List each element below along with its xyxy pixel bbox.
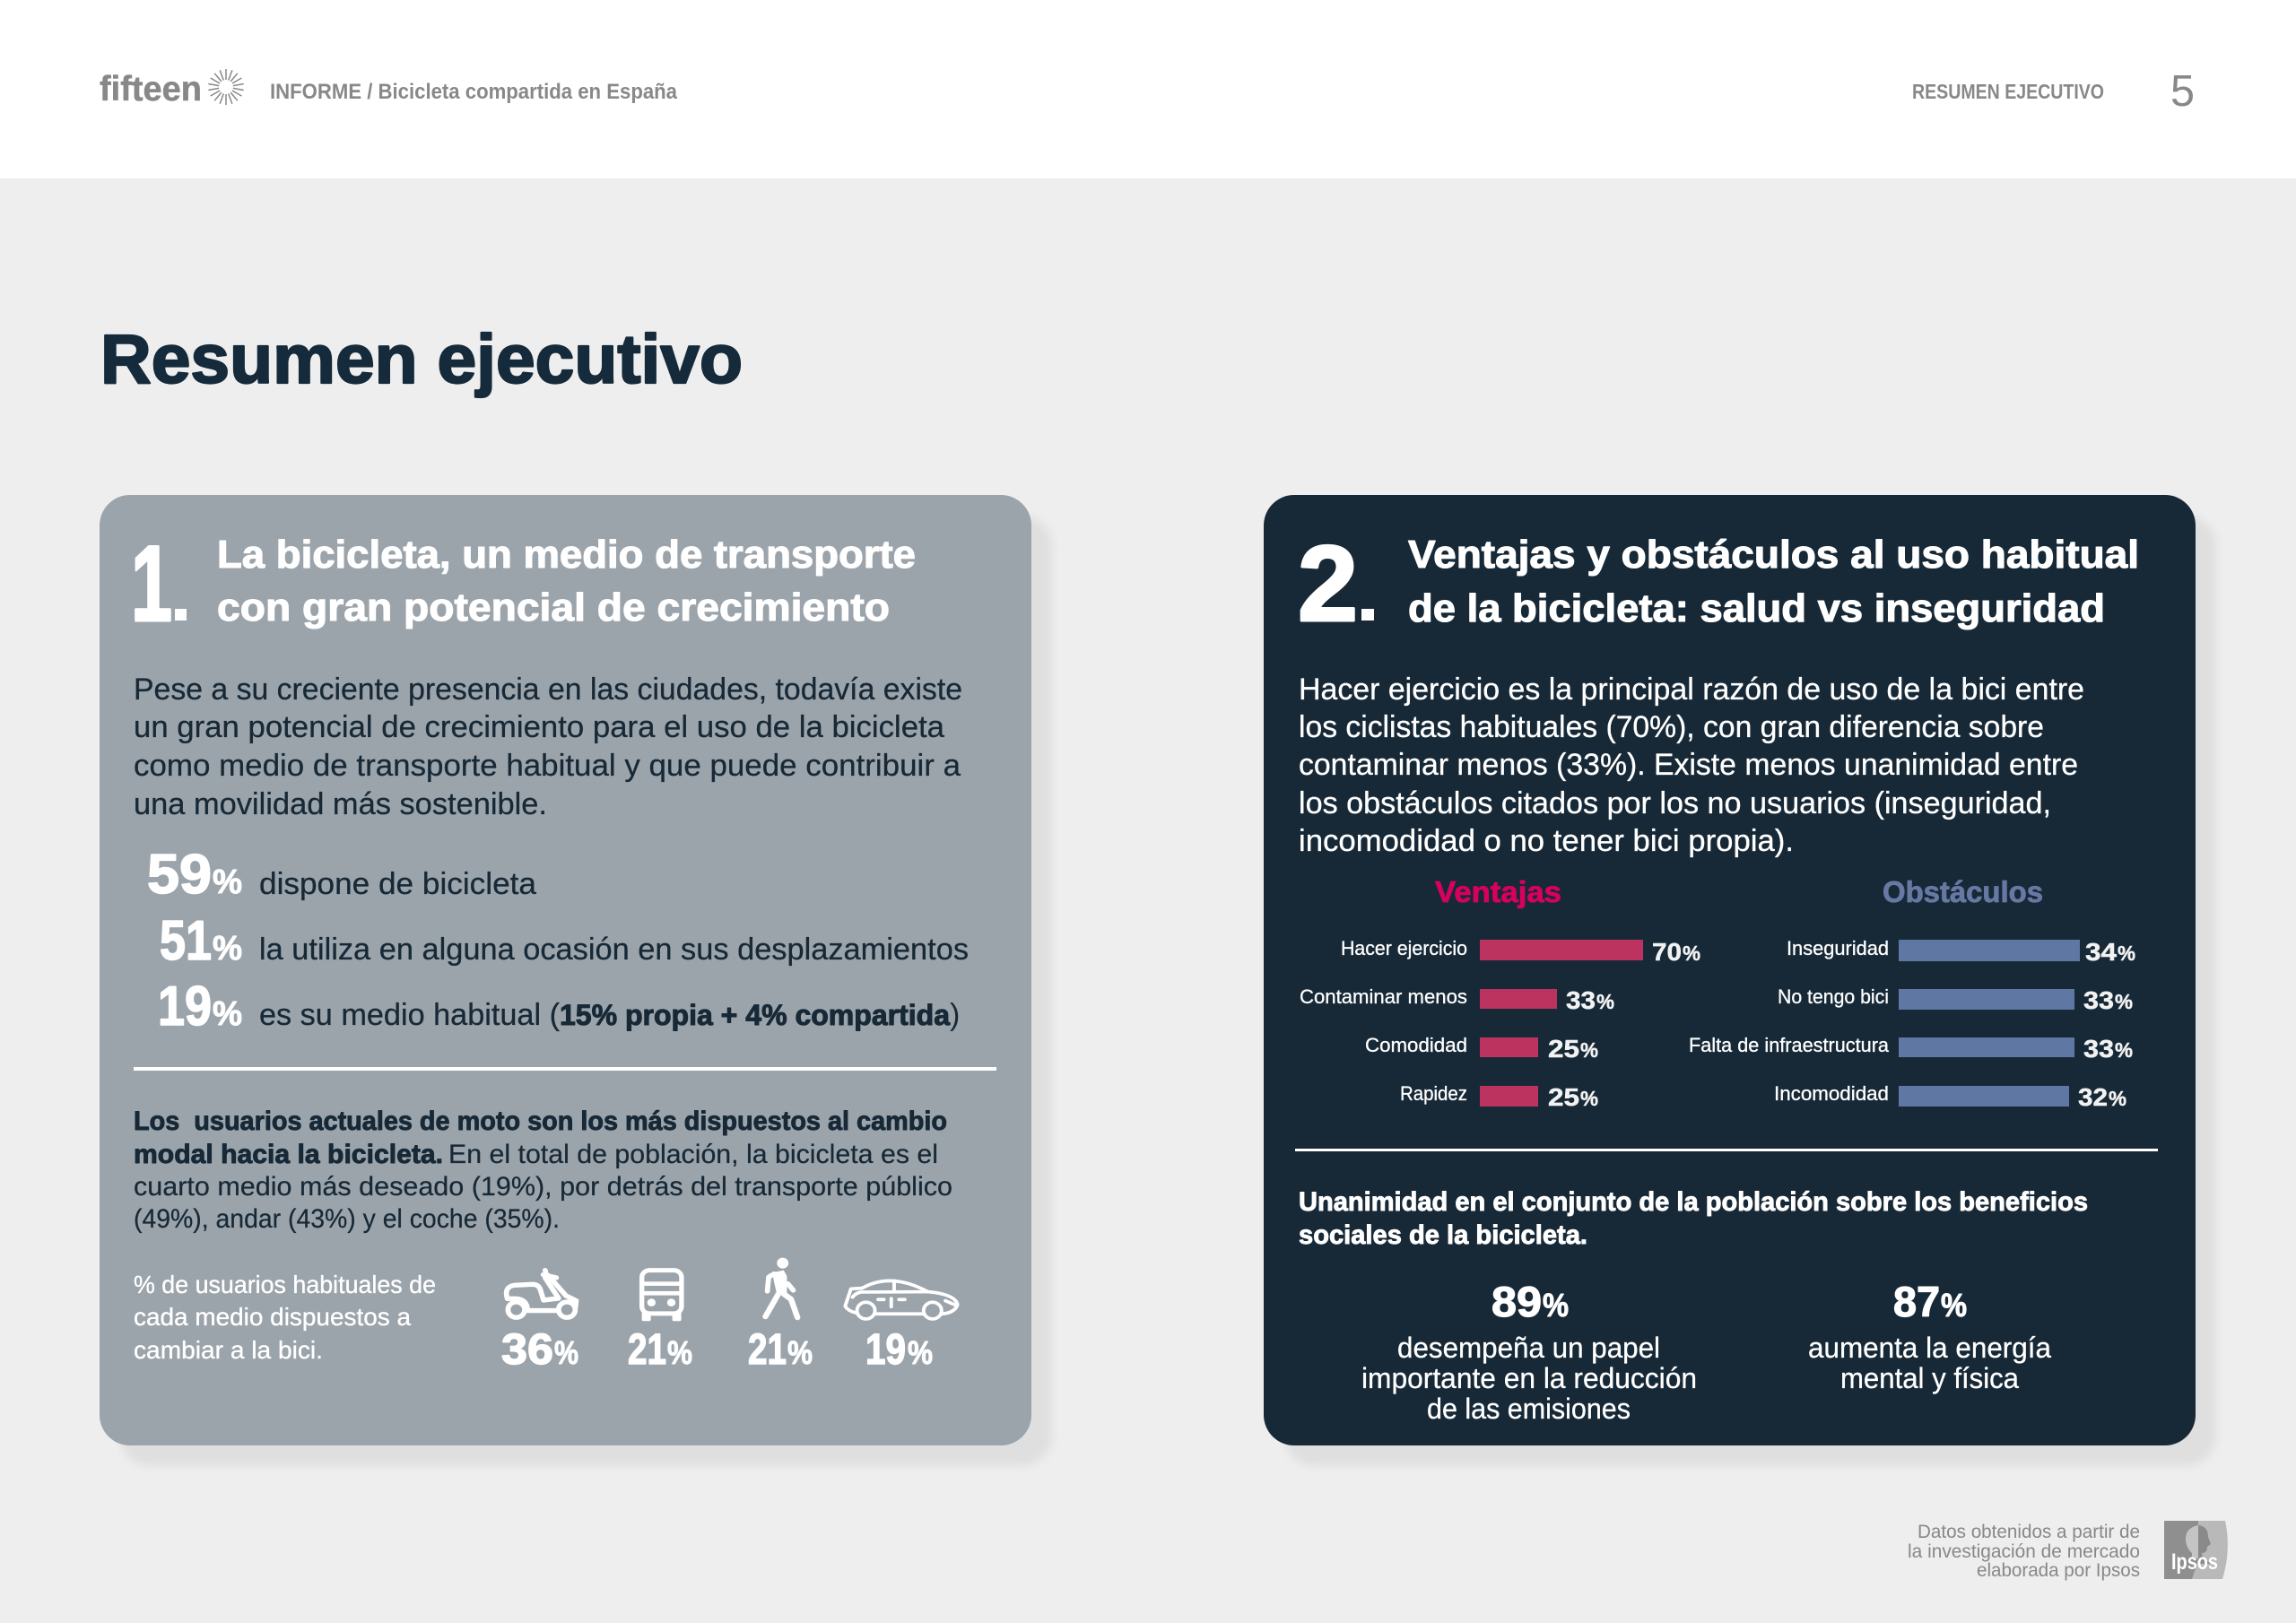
value: 21% walk: 21 <box>748 1326 787 1374</box>
stat: 87% <box>1808 1278 2051 1394</box>
row: inseguridad <box>1787 937 2135 966</box>
panel 1 lower text: Los usuarios actuales de moto son los más dispuestos al cambio <box>134 1107 947 1136</box>
row: no tengo bici: % <box>2115 990 2133 1013</box>
panel 2 intro text: Hacer ejercicio es la principal razón de uso de la bici entre <box>1299 673 2084 707</box>
panel 2 heading: de la bicicleta: salud vs inseguridad <box>1408 586 2105 630</box>
panel 2 intro text: contaminar menos (33%). Existe menos unanimidad entre <box>1299 748 2078 782</box>
stat: 59%: dispone de bicicleta <box>259 867 536 901</box>
stat: 89% <box>1361 1278 1697 1425</box>
row: inseguridad: 34 <box>2085 938 2117 966</box>
value: 36%: % <box>554 1334 578 1371</box>
modal shift note <box>134 1271 436 1364</box>
stat: 51%: % <box>213 930 242 968</box>
logo: ipsos <box>2164 1521 2228 1579</box>
panel 1 intro text: una movilidad más sostenible. <box>134 787 547 821</box>
panel 1 number: 1 <box>131 524 172 644</box>
value: 36% <box>501 1326 578 1374</box>
panel 1 intro text: Pese a su creciente presencia en las ciudades, todavía existe <box>134 673 962 707</box>
panel 1 lower text: En el total de población, la bicicleta es el <box>448 1140 938 1169</box>
benefits heading: sociales de la bicicleta. <box>1299 1220 1587 1250</box>
row: comodidad <box>1365 1034 1598 1063</box>
row: rapidez: Rapidez <box>1400 1082 1467 1105</box>
row: rapidez <box>1400 1082 1598 1111</box>
row: falta de infraestructura: 33 <box>2083 1035 2114 1063</box>
stat: 19%: 15% propia + 4% compartida <box>560 999 950 1031</box>
report label: INFORME / Bicicleta compartida en España <box>270 80 678 104</box>
row: inseguridad: Inseguridad <box>1787 937 1889 959</box>
panel 1 heading: La bicicleta, un medio de transporte <box>217 533 916 577</box>
row: inseguridad: % <box>2118 942 2135 965</box>
panel 2 intro text: los obstáculos citados por los no usuarios (inseguridad, <box>1299 786 2051 820</box>
icon: car <box>845 1280 958 1319</box>
source note <box>1908 1522 2140 1581</box>
benefits heading: Unanimidad en el conjunto de la población sobre los beneficios <box>1299 1187 2088 1217</box>
stat: 59%: % <box>213 864 242 901</box>
panel 1 lower text <box>134 1107 952 1234</box>
value: 19%: % <box>908 1334 933 1371</box>
row: hacer ejercicio: 70 <box>1652 938 1682 966</box>
source note: Datos obtenidos a partir de <box>1918 1522 2140 1542</box>
stat: 89%: desempeña un papel <box>1397 1332 1660 1364</box>
panel 1 heading <box>217 533 916 629</box>
icon: walker <box>765 1258 797 1317</box>
panel 2 heading: Ventajas y obstáculos al uso habitual <box>1408 533 2139 577</box>
stat: 87%: 87 <box>1893 1278 1940 1325</box>
stat: 89%: de las emisiones <box>1427 1393 1631 1425</box>
panel 2 number: 2 <box>1298 524 1358 644</box>
panel 2: ventajas y obstaculos <box>1264 495 2216 1466</box>
stat: 89%: importante en la reducción <box>1361 1362 1697 1394</box>
section label: RESUMEN EJECUTIVO <box>1912 80 2104 103</box>
stat: 51% <box>160 910 969 972</box>
value: 21% walk: % <box>787 1334 813 1371</box>
panel 1 intro text <box>134 673 962 821</box>
row: hacer ejercicio: Hacer ejercicio <box>1341 937 1467 959</box>
stat: 19%: ) <box>950 998 960 1032</box>
icon: scooter <box>507 1271 576 1317</box>
panel 2 intro text: los ciclistas habituales (70%), con gran diferencia sobre <box>1299 710 2044 744</box>
stat: 51%: la utiliza en alguna ocasión en sus desplazamientos <box>259 933 969 967</box>
row: no tengo bici: 33 <box>2083 986 2114 1014</box>
panel 1 intro text: un gran potencial de crecimiento para el uso de la bicicleta <box>134 710 944 744</box>
title: Resumen ejecutivo <box>100 321 743 398</box>
panel 2 intro text: incomodidad o no tener bici propia). <box>1299 824 1794 858</box>
row: comodidad: 25 <box>1548 1035 1579 1063</box>
logo: ipsos: Ipsos <box>2171 1549 2218 1575</box>
row: hacer ejercicio: % <box>1683 942 1700 965</box>
stat: 51%: 51 <box>160 910 212 972</box>
panel 1: la bicicleta <box>100 495 1052 1466</box>
icon: bus <box>642 1271 682 1321</box>
chart: obstaculos <box>1689 875 2135 1111</box>
value: 19%: 19 <box>865 1326 906 1374</box>
row: hacer ejercicio <box>1341 937 1700 966</box>
panel 1 lower text: cuarto medio más deseado (19%), por detrás del transporte público <box>134 1172 952 1202</box>
row: comodidad: % <box>1580 1038 1598 1062</box>
row: no tengo bici: No tengo bici <box>1778 985 1889 1008</box>
modal shift note: cambiar a la bici. <box>134 1336 323 1364</box>
stat: 89%: % <box>1543 1287 1569 1324</box>
row: incomodidad: Incomodidad <box>1774 1082 1889 1105</box>
row: incomodidad <box>1774 1082 2126 1111</box>
value: 21% bus: 21 <box>628 1326 666 1374</box>
stat: 19%: % <box>213 995 242 1033</box>
modal shift note: cada medio dispuestos a <box>134 1303 411 1331</box>
stat: 59% <box>147 844 536 906</box>
stat: 87%: aumenta la energía <box>1808 1332 2051 1364</box>
panel 1 lower text: (49%), andar (43%) y el coche (35%). <box>134 1204 560 1234</box>
row: no tengo bici <box>1778 985 2133 1014</box>
source note: elaborada por Ipsos <box>1977 1560 2140 1581</box>
modal shift note: % de usuarios habituales de <box>134 1271 436 1298</box>
panel 1 heading: con gran potencial de crecimiento <box>217 586 890 629</box>
stat: 19%: 19 <box>158 976 212 1037</box>
row: falta de infraestructura <box>1689 1034 2133 1063</box>
chart: ventajas <box>1300 875 1700 1111</box>
row: incomodidad: % <box>2109 1087 2126 1110</box>
row: falta de infraestructura: Falta de infraestructura <box>1689 1034 1890 1056</box>
row: rapidez: % <box>1580 1087 1598 1110</box>
page number: 5 <box>2170 67 2195 116</box>
row: contaminar menos: % <box>1596 990 1614 1013</box>
stat: 19% <box>158 976 960 1037</box>
stat: 59%: 59 <box>147 844 212 906</box>
chart heading: ventajas: Ventajas <box>1435 875 1561 908</box>
value: 21% bus: % <box>667 1334 692 1371</box>
panel 1 intro text: como medio de transporte habitual y que puede contribuir a <box>134 749 961 783</box>
row: rapidez: 25 <box>1548 1083 1579 1111</box>
header bar <box>0 0 2296 178</box>
panel 2 intro text <box>1299 673 2084 858</box>
row: comodidad: Comodidad <box>1365 1034 1467 1056</box>
source note: la investigación de mercado <box>1908 1541 2140 1562</box>
logo: fifteen: fifteen <box>100 70 202 108</box>
row: incomodidad: 32 <box>2078 1083 2108 1111</box>
value: 36%: 36 <box>501 1326 553 1374</box>
row: falta de infraestructura: % <box>2115 1038 2133 1062</box>
row: contaminar menos: Contaminar menos <box>1300 985 1467 1008</box>
chart heading: obstaculos: Obstáculos <box>1883 875 2043 908</box>
benefits heading <box>1299 1187 2088 1250</box>
panel 2 heading <box>1408 533 2139 630</box>
row: contaminar menos <box>1300 985 1614 1014</box>
panel 1 lower text: modal hacia la bicicleta. <box>134 1140 443 1169</box>
row: contaminar menos: 33 <box>1566 986 1596 1014</box>
stat: 89%: 89 <box>1492 1278 1542 1325</box>
stat: 87%: % <box>1941 1287 1967 1324</box>
stat: 87%: mental y física <box>1840 1362 2019 1394</box>
stat: 19%: es su medio habitual ( <box>259 998 561 1032</box>
